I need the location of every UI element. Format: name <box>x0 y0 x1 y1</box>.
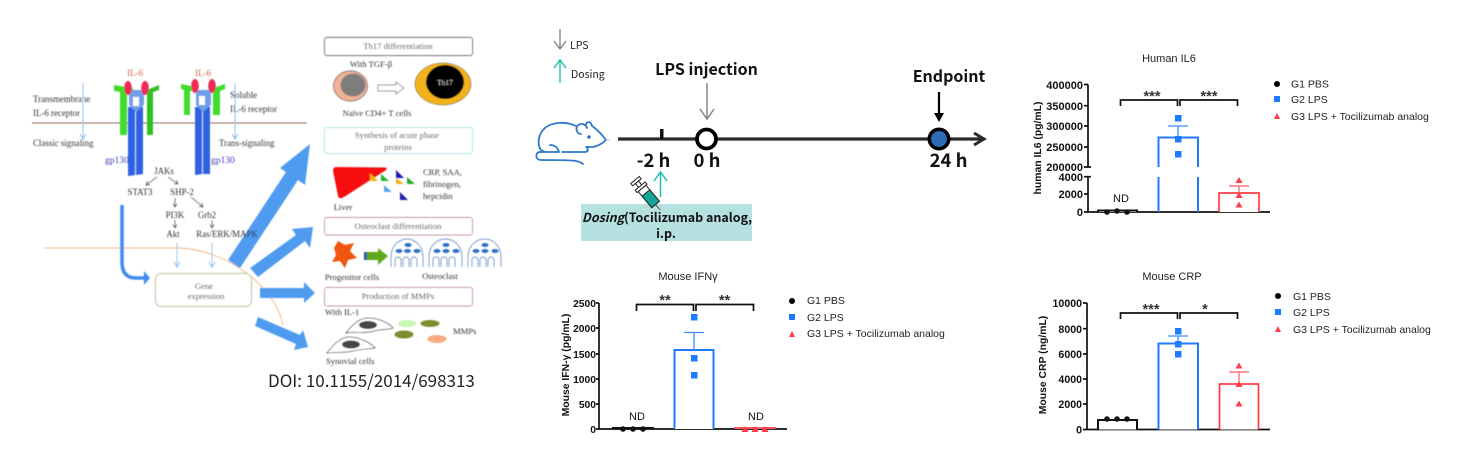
label: with IL-1: With IL-1 <box>325 307 359 317</box>
label: soluble receptor <box>230 90 277 114</box>
legend <box>1275 291 1431 336</box>
naive T cell <box>334 71 368 101</box>
progenitor cell <box>332 241 357 268</box>
legend <box>1274 78 1429 123</box>
large arrow to MMPs <box>255 317 308 350</box>
legend: dosing arrow: Dosing <box>571 67 605 82</box>
box: Th17 differentiation <box>324 38 472 56</box>
data points G3 <box>1236 362 1242 406</box>
y axis label: Mouse CRP (ng/mL) <box>1038 316 1049 414</box>
y axis tick labels <box>573 299 596 436</box>
box: Th17 differentiation: Th17 differentiation <box>363 41 433 51</box>
chart title: Human IL6 <box>1142 53 1196 65</box>
significance stars: ** <box>719 293 730 309</box>
label: classic signaling: Classic signaling <box>33 138 94 148</box>
error bar G2 <box>684 332 704 350</box>
panel: IL-6 signaling pathway diagram <box>32 38 501 366</box>
osteoclast cells <box>391 239 501 267</box>
receptor complex left <box>114 81 159 176</box>
y axis tick labels: 0 <box>590 425 596 436</box>
MMP blobs <box>394 320 446 343</box>
label: with TGF-beta: With TGF-β <box>350 59 392 69</box>
y axis tick labels: 1000 <box>573 375 596 386</box>
legend: G1 PBS <box>807 295 845 307</box>
bar G1 <box>1098 210 1137 212</box>
axes <box>1084 84 1270 212</box>
icon: mouse <box>536 122 610 164</box>
arrow: classic signaling <box>82 83 84 139</box>
box: production of MMPs: Production of MMPs <box>362 291 435 301</box>
label: IL-6 right: IL-6 <box>195 68 211 78</box>
y axis tick labels <box>1053 298 1082 436</box>
label: proteins list: hepcidin <box>423 191 453 201</box>
light blue arrows to gene expression <box>177 243 212 267</box>
error bar G2 <box>1168 126 1188 137</box>
label: soluble receptor: IL-6 receptor <box>230 104 277 114</box>
arrow: LPS injection <box>700 83 714 119</box>
y axis tick labels: 250000 <box>1046 142 1083 154</box>
y axis tick labels: 1500 <box>573 350 596 361</box>
legend: LPS arrow: LPS <box>570 38 588 53</box>
bar G3 <box>735 428 775 429</box>
legend: G2 LPS <box>1291 94 1328 106</box>
arrow: trans-signaling <box>234 83 236 139</box>
bar G1 <box>1098 420 1137 430</box>
chart title: Mouse CRP <box>1142 271 1202 283</box>
arrow: endpoint <box>934 92 944 122</box>
chart: Human IL6 <box>1033 53 1429 219</box>
y axis tick labels: 4000 <box>1058 374 1082 386</box>
cell membrane line <box>32 122 307 124</box>
Th17 cell <box>415 63 471 105</box>
data points G2 <box>691 314 698 378</box>
bar G2 <box>1158 138 1198 212</box>
dosing box <box>581 204 752 242</box>
error bar G3 <box>1229 186 1249 193</box>
intracellular pathway labels: SHP-2 <box>170 187 194 197</box>
box: osteoclast differentiation <box>324 218 472 235</box>
label: liver: Liver <box>334 202 352 212</box>
bar G2 <box>674 350 714 429</box>
y axis tick labels <box>1046 80 1083 219</box>
intracellular pathway labels: PI3K <box>166 210 185 220</box>
ND label G1: ND <box>629 411 645 423</box>
intracellular pathway labels: Ras/ERK/MAPK <box>196 229 258 239</box>
significance stars <box>1144 89 1218 105</box>
bar G2 <box>1158 344 1198 430</box>
significance stars <box>1143 302 1208 318</box>
legend: G1 PBS <box>1291 78 1329 90</box>
label: proteins list: fibrinogen, <box>423 179 461 189</box>
heading: LPS injection: LPS injection <box>655 56 758 80</box>
legend: G2 LPS <box>1293 307 1330 319</box>
legend: G3 LPS + Tocilizumab analog <box>1291 111 1429 123</box>
chart title: Mouse IFNγ <box>658 271 718 283</box>
legend: G2 LPS <box>807 312 844 324</box>
legend: LPS arrow <box>554 29 588 53</box>
heading: endpoint: Endpoint <box>913 63 986 87</box>
chart: Mouse CRP <box>1038 271 1431 436</box>
intracellular pathway labels: JAKs <box>154 166 174 176</box>
error bar G3 <box>1229 372 1249 384</box>
box: acute phase proteins: proteins <box>384 142 412 152</box>
intracellular pathway labels: STAT3 <box>128 187 153 197</box>
arrow: STAT3 to gene expression <box>122 205 150 285</box>
label: gp130 right: gp130 <box>211 156 235 166</box>
legend: G1 PBS <box>1293 291 1331 303</box>
box: acute phase proteins <box>324 128 472 154</box>
marker: 24 h endpoint circle <box>929 129 949 149</box>
y axis tick labels: 4000 <box>1059 172 1083 184</box>
y axis tick labels: 400000 <box>1046 80 1083 92</box>
box: osteoclast differentiation: Osteoclast differentiation <box>355 221 442 231</box>
chart: Mouse IFN-gamma <box>561 271 945 436</box>
label: progenitor cells: Progenitor cells <box>325 272 380 282</box>
axes <box>1083 303 1270 430</box>
box: acute phase proteins: Synthesis of acute phase <box>355 130 439 140</box>
green differentiation arrow <box>364 248 388 265</box>
significance brackets <box>1120 100 1238 106</box>
timeline axis <box>618 133 984 145</box>
significance stars: *** <box>1144 89 1161 105</box>
hollow arrow <box>378 82 404 94</box>
Th17 cell: Th17 <box>437 78 453 87</box>
legend: dosing arrow <box>554 60 605 83</box>
legend <box>789 295 945 340</box>
data points G2 <box>1175 328 1182 358</box>
y axis tick labels: 500 <box>579 400 596 411</box>
arrow: dosing <box>654 172 667 197</box>
y axis tick labels: 6000 <box>1058 349 1082 361</box>
y axis tick labels: 2500 <box>573 299 596 310</box>
y axis tick labels: 2000 <box>1058 399 1082 411</box>
large arrow to acute phase <box>250 227 313 277</box>
ND label: ND <box>1113 193 1129 205</box>
label: 24 h: 24 h <box>930 147 967 173</box>
marker: 0 h circle <box>697 130 716 148</box>
nuclear membrane curve <box>44 248 283 325</box>
significance stars: *** <box>1201 89 1218 105</box>
y axis label: human IL6 (pg/mL) <box>1033 102 1044 194</box>
label: transmembrane receptor <box>33 94 90 118</box>
label: IL-6 left: IL-6 <box>127 68 143 78</box>
significance stars: * <box>1202 302 1208 318</box>
data points G2 <box>1175 115 1182 158</box>
y axis tick labels: 350000 <box>1046 101 1083 113</box>
ND label G3: ND <box>748 411 764 423</box>
large arrow to osteoclast <box>260 282 315 303</box>
synovial cells <box>327 318 393 353</box>
label: transmembrane receptor: IL-6 receptor <box>33 108 80 118</box>
error bar G2 <box>1168 336 1188 343</box>
intracellular pathway labels <box>128 166 258 239</box>
y axis tick labels: 2000 <box>573 324 596 335</box>
label: osteoclast: Osteoclast <box>422 271 459 281</box>
box: production of MMPs <box>324 288 472 306</box>
label: 0 h: 0 h <box>694 147 720 173</box>
bar G1 <box>613 428 653 429</box>
label: proteins list: CRP, SAA, <box>423 167 462 177</box>
pathway small arrows <box>146 177 212 228</box>
y axis label: Mouse IFN-γ (pg/mL) <box>561 314 572 416</box>
bar G3 <box>1220 384 1258 430</box>
gene expression box <box>156 274 252 306</box>
intracellular pathway labels: Akt <box>166 229 180 239</box>
label: trans-signaling: Trans-signaling <box>219 138 275 148</box>
bar G3 <box>1219 193 1259 212</box>
data points G3 <box>742 426 768 432</box>
y axis tick labels: 0 <box>1076 424 1082 436</box>
data points G1 <box>1104 416 1130 422</box>
legend: G3 LPS + Tocilizumab analog <box>1293 324 1431 336</box>
y axis tick labels: 8000 <box>1058 324 1082 336</box>
y axis tick labels: 0 <box>1077 207 1083 219</box>
data points G1 <box>1104 208 1130 215</box>
label: synovial cells: Synovial cells <box>326 356 375 366</box>
label: transmembrane receptor: Transmembrane <box>33 94 90 104</box>
data points G1 <box>620 426 646 432</box>
label: soluble receptor: Soluble <box>230 90 257 100</box>
label: MMPs: MMPs <box>453 326 477 336</box>
liver <box>333 167 387 198</box>
significance stars <box>659 293 730 309</box>
significance brackets <box>1120 313 1238 319</box>
protein triangles <box>370 170 415 200</box>
receptor complex right <box>181 79 225 175</box>
legend: G3 LPS + Tocilizumab analog <box>807 328 945 340</box>
y axis tick labels: 200000 <box>1046 162 1083 174</box>
dosing box: i.p. <box>656 223 676 242</box>
tick: -2 h <box>660 129 664 139</box>
y axis tick labels: 2000 <box>1059 189 1083 201</box>
icon: syringe <box>630 176 665 214</box>
significance stars: *** <box>1143 302 1160 318</box>
y axis tick labels: 300000 <box>1046 121 1083 133</box>
intracellular pathway labels: Grb2 <box>198 210 216 220</box>
significance stars: ** <box>659 293 671 309</box>
large arrow to Th17 <box>228 144 310 268</box>
label: proteins list <box>423 167 462 201</box>
label: -2 h: -2 h <box>637 147 670 173</box>
gene expression box: expression <box>188 291 225 301</box>
data points G3 <box>1236 177 1242 208</box>
y axis tick labels: 10000 <box>1053 298 1082 310</box>
DOI citation: DOI: 10.1155/2014/698313 <box>268 367 475 392</box>
panel: study timeline <box>536 29 986 242</box>
dosing box: Dosing(Tocilizumab analog, <box>582 207 752 226</box>
label: naive CD4 T cells: Naïve CD4+ T cells <box>343 108 412 118</box>
axes <box>596 303 787 429</box>
label: gp130 left: gp130 <box>105 156 129 166</box>
significance brackets <box>636 304 754 311</box>
gene expression box: Gene <box>195 281 213 291</box>
